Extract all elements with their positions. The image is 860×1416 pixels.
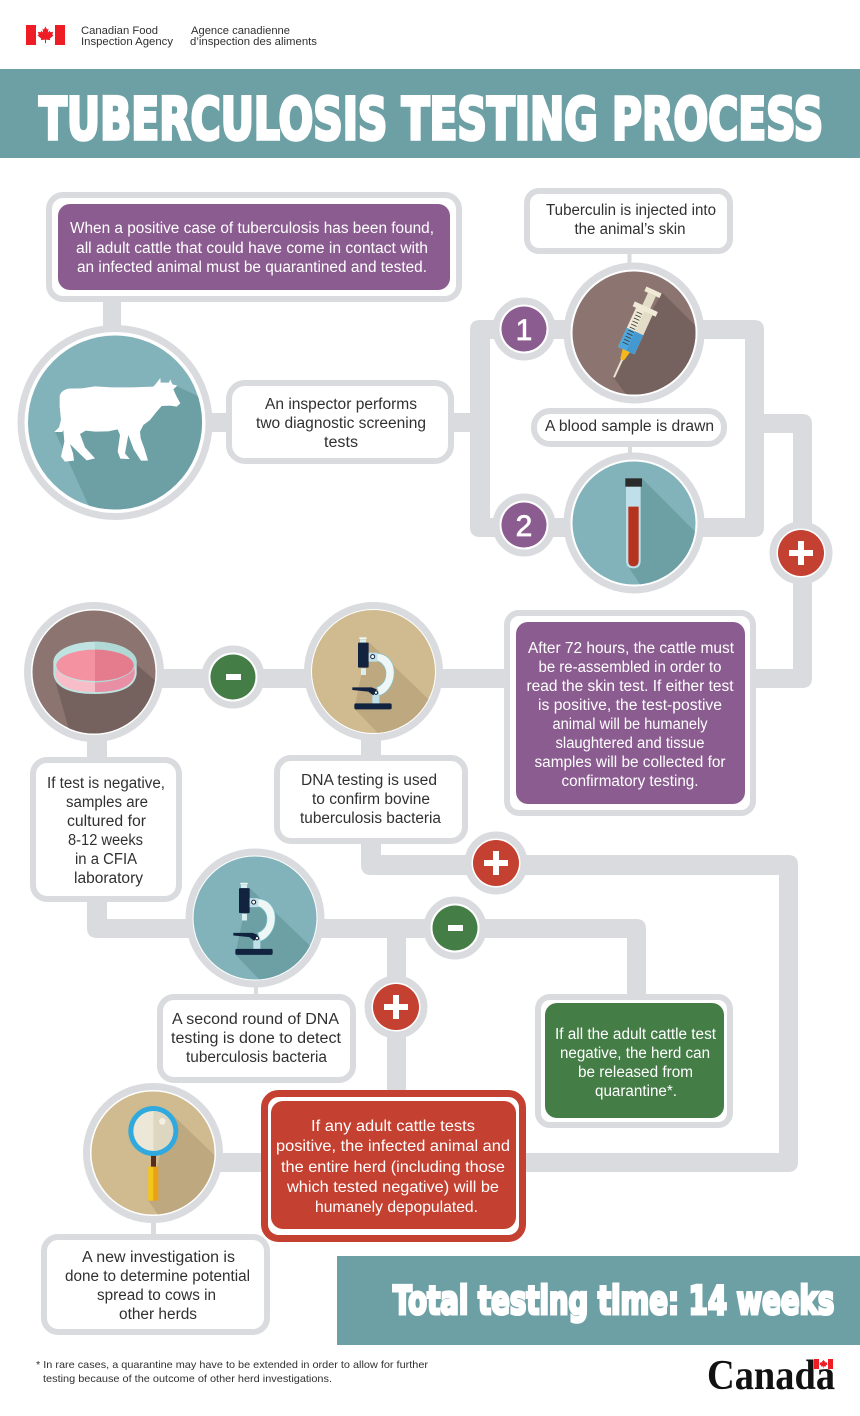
icon: test tube [564,452,704,594]
culture box: laboratory [74,870,143,887]
agency name English: Canadian Food [81,25,158,37]
second DNA round box: testing is done to detect [171,1030,342,1047]
agency name French: d’inspection des aliments [190,36,318,48]
icon: second microscope [189,852,324,1006]
new investigation box [44,1237,267,1332]
panel: quarantine intro: all adult cattle that could have come in contact with [76,240,428,257]
tuberculin box: Tuberculin is injected into [546,202,716,219]
culture box: cultured for [67,813,146,830]
icon: cow [21,328,213,523]
tuberculin box: the animal’s skin [574,221,686,238]
DNA testing box: tuberculosis bacteria [300,810,441,827]
panel: 72 hours: read the skin test. If either test [526,678,734,695]
panel: 72 hours: be re-assembled in order to [538,659,722,676]
minus badge: first negative [205,649,261,705]
new investigation box: other herds [119,1306,197,1323]
panel: herd depopulated (red) [264,1094,522,1238]
connectors [87,252,812,1238]
panel: 72 hours: is positive, the test-postive [538,697,722,714]
minus badge: second negative [427,900,483,956]
panel: quarantine intro [49,195,459,299]
panel: herd released (green): quarantine*. [595,1083,677,1100]
inspector box: tests [324,434,358,451]
plus badge: second positive [368,979,424,1035]
panel: herd depopulated (red): positive, the infected animal and [276,1138,510,1155]
DNA testing box: DNA testing is used [301,772,437,789]
step badge 1 [496,301,552,357]
title banner [0,69,860,158]
second DNA round box: A second round of DNA [172,1011,340,1028]
new investigation box: spread to cows in [97,1287,216,1304]
panel: herd released (green): negative, the herd can [560,1045,710,1062]
footnote: testing because of the outcome of other herd investigations. [43,1373,332,1385]
inspector box: An inspector performs [265,396,417,413]
icon: syringe [564,262,704,404]
panel: quarantine intro: When a positive case of tuberculosis has been found, [70,220,434,237]
panel: herd released (green): be released from [578,1064,693,1081]
tuberculin box [527,191,730,251]
step badge 2 [496,497,552,553]
panel: 72 hours: confirmatory testing. [562,773,698,790]
culture box: samples are [66,794,148,811]
panel: herd depopulated (red): which tested negative) will be [286,1179,499,1196]
icon: magnifying glass [86,1086,230,1227]
header: government signature [26,25,318,48]
culture box: If test is negative, [47,775,165,792]
culture box: in a CFIA [75,851,138,868]
title banner: TUBERCULOSIS TESTING PROCESS [39,85,823,153]
icon: microscope [308,606,443,760]
panel: 72 hours [507,613,753,813]
panel: 72 hours: slaughtered and tissue [556,735,704,752]
panel: herd released (green) [538,997,730,1125]
second DNA round box [160,997,353,1080]
inspector box: two diagnostic screening [256,415,426,432]
agency name French: Agence canadienne [191,25,290,37]
icon: petri dish [28,606,167,760]
total testing time banner [337,1256,860,1345]
panel: herd depopulated (red): the entire herd (including those [281,1159,505,1176]
agency name English: Inspection Agency [81,36,174,48]
panel: herd depopulated (red): If any adult cattle tests [311,1118,475,1135]
second DNA round box: tuberculosis bacteria [186,1049,327,1066]
total testing time banner: Total testing time: 14 weeks [393,1278,834,1323]
panel: 72 hours: animal will be humanely [552,716,708,733]
panel: 72 hours: samples will be collected for [534,754,726,771]
new investigation box: done to determine potential [65,1268,250,1285]
panel: 72 hours: After 72 hours, the cattle must [528,640,735,657]
panel: herd depopulated (red): humanely depopulated. [315,1199,478,1216]
plus badge: DNA positive [468,835,524,891]
Canada wordmark: Canada [707,1351,835,1398]
footnote [36,1359,429,1385]
step badge 2: 2 [516,510,532,543]
agency name French [190,25,318,48]
DNA testing box [277,758,465,841]
footnote: * In rare cases, a quarantine may have to be extended in order to allow for further [36,1359,429,1371]
panel: herd released (green): If all the adult cattle test [555,1026,717,1043]
blood sample box: A blood sample is drawn [545,418,714,435]
blood sample box [534,411,724,444]
plus badge: first positive [773,525,829,581]
new investigation box: A new investigation is [82,1249,235,1266]
culture box [33,760,179,899]
icon: Canadian flag [26,25,65,45]
DNA testing box: to confirm bovine [312,791,430,808]
inspector box [229,383,451,461]
agency name English [81,25,174,48]
panel: quarantine intro: an infected animal must be quarantined and tested. [77,259,427,276]
culture box: 8-12 weeks [68,832,143,849]
step badge 1: 1 [516,314,532,347]
